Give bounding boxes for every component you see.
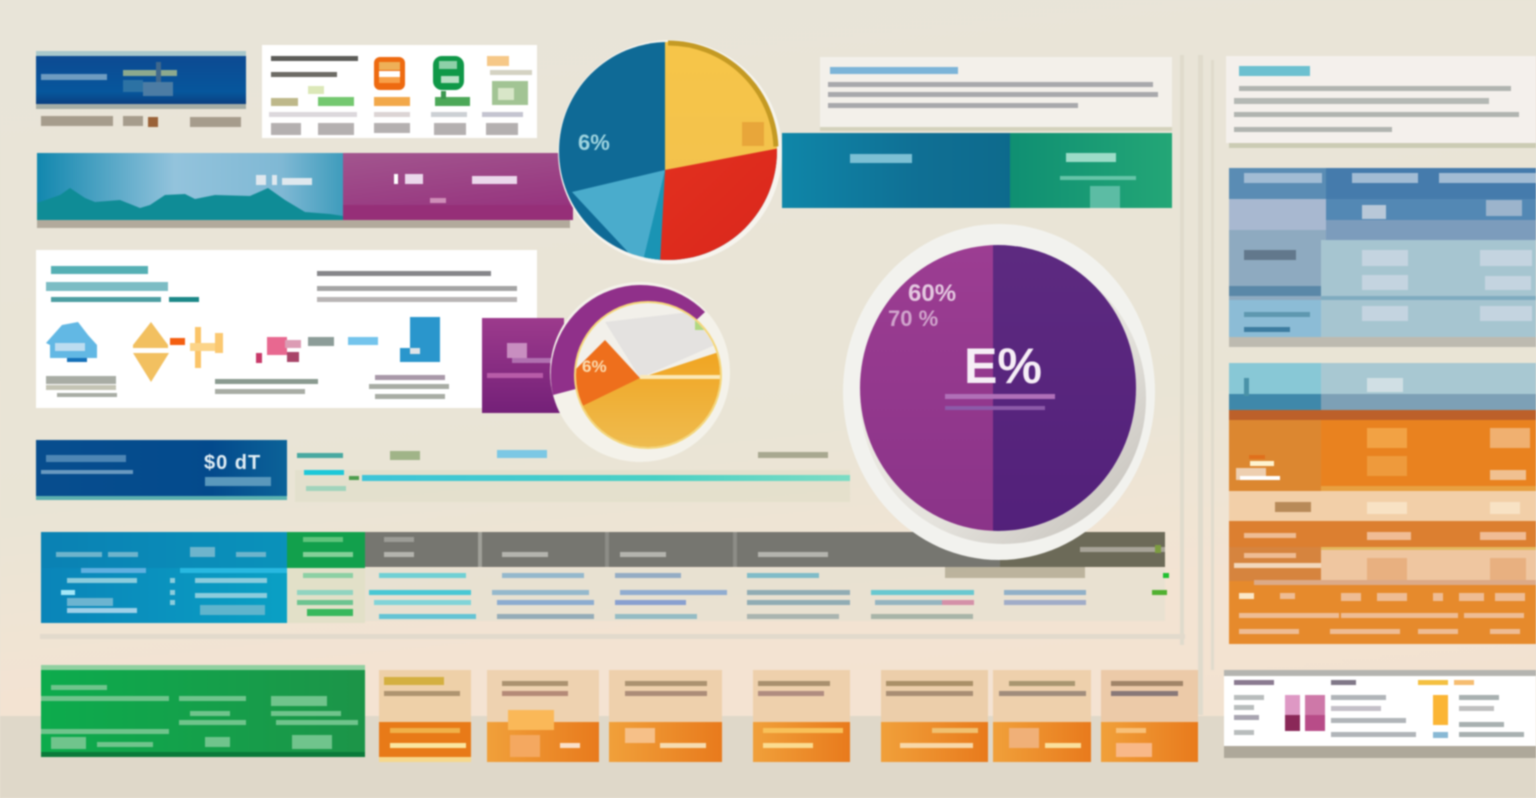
icon: small orange bar chart — [170, 327, 223, 368]
card: orange 5 — [881, 670, 988, 762]
banner label — [256, 175, 312, 185]
icon: green box — [433, 56, 470, 106]
panel: navy band — [36, 440, 287, 500]
panel: landscape banner — [37, 153, 570, 228]
right vertical frame — [1180, 55, 1214, 715]
main frame backdrop — [290, 670, 1200, 716]
shelf line — [40, 634, 1185, 639]
icon: amber diamond — [133, 322, 169, 382]
table: blue stats — [1229, 168, 1536, 347]
card: orange 3 — [609, 670, 722, 762]
card: orange 4 — [753, 670, 850, 762]
table: orange stats — [1229, 363, 1536, 644]
panel: grey header band — [365, 532, 1165, 567]
slice: light blue — [572, 170, 665, 265]
bottom floor band — [0, 716, 1536, 798]
panel: navy band: $0 dT — [204, 452, 261, 474]
table rows — [287, 567, 1169, 623]
row labels — [1244, 173, 1536, 183]
chart: large purple pie — [843, 224, 1155, 560]
caption under header — [41, 116, 241, 127]
panel: teal banner — [782, 133, 1010, 208]
legend: gold swatches — [1418, 680, 1474, 738]
chart: large purple pie: E% — [964, 338, 1042, 394]
icon: blue cloud — [46, 322, 97, 362]
icon: blue arrow — [308, 317, 440, 362]
header tail overlay — [1080, 545, 1165, 553]
card: orange 7 — [1101, 670, 1198, 762]
icon: ship — [1236, 455, 1280, 480]
icon: pink flower — [256, 337, 301, 363]
icon: document — [487, 56, 532, 105]
card: orange 1 — [379, 670, 471, 762]
panel: white icon card — [262, 45, 537, 138]
slice: yellow — [665, 40, 780, 170]
panel: white icon strip — [36, 250, 537, 408]
percentage labels: 60% — [908, 280, 956, 307]
mountains — [37, 188, 343, 220]
chart: large purple pie: 70 % — [888, 306, 938, 331]
legend: pink swatches — [1285, 695, 1325, 731]
text block — [317, 271, 517, 302]
slice: gold — [582, 352, 721, 448]
chart: small pie — [550, 282, 730, 462]
panel: purple banner — [343, 153, 573, 220]
card: orange 6 — [993, 670, 1091, 762]
panel: top text card — [820, 57, 1172, 131]
cell values — [1367, 428, 1530, 580]
chart: small pie: 6% — [582, 357, 607, 376]
slice: white — [605, 312, 715, 378]
faint labels — [269, 112, 523, 135]
panel: blue header — [36, 51, 246, 109]
panel: green banner — [1010, 133, 1172, 208]
slice: red — [655, 148, 780, 265]
panel: bottom right legend card — [1224, 670, 1536, 758]
icon: green mini chart — [308, 86, 354, 106]
tag: purple label — [482, 318, 564, 413]
chart: top pie — [555, 40, 782, 265]
panel: top right text card — [1226, 56, 1536, 148]
chart: timeline — [295, 450, 850, 502]
header sky — [1229, 363, 1536, 410]
heading — [46, 266, 199, 302]
heading glyphs — [123, 62, 177, 96]
slice: orange — [575, 339, 640, 407]
captions — [46, 375, 449, 399]
panel: blue table — [41, 532, 287, 623]
panel: green header cell — [287, 532, 365, 568]
panel: green summary — [41, 665, 365, 757]
icon: orange box — [374, 57, 410, 106]
chart: top pie: 6% — [578, 130, 610, 155]
card: orange 2 — [487, 670, 599, 762]
